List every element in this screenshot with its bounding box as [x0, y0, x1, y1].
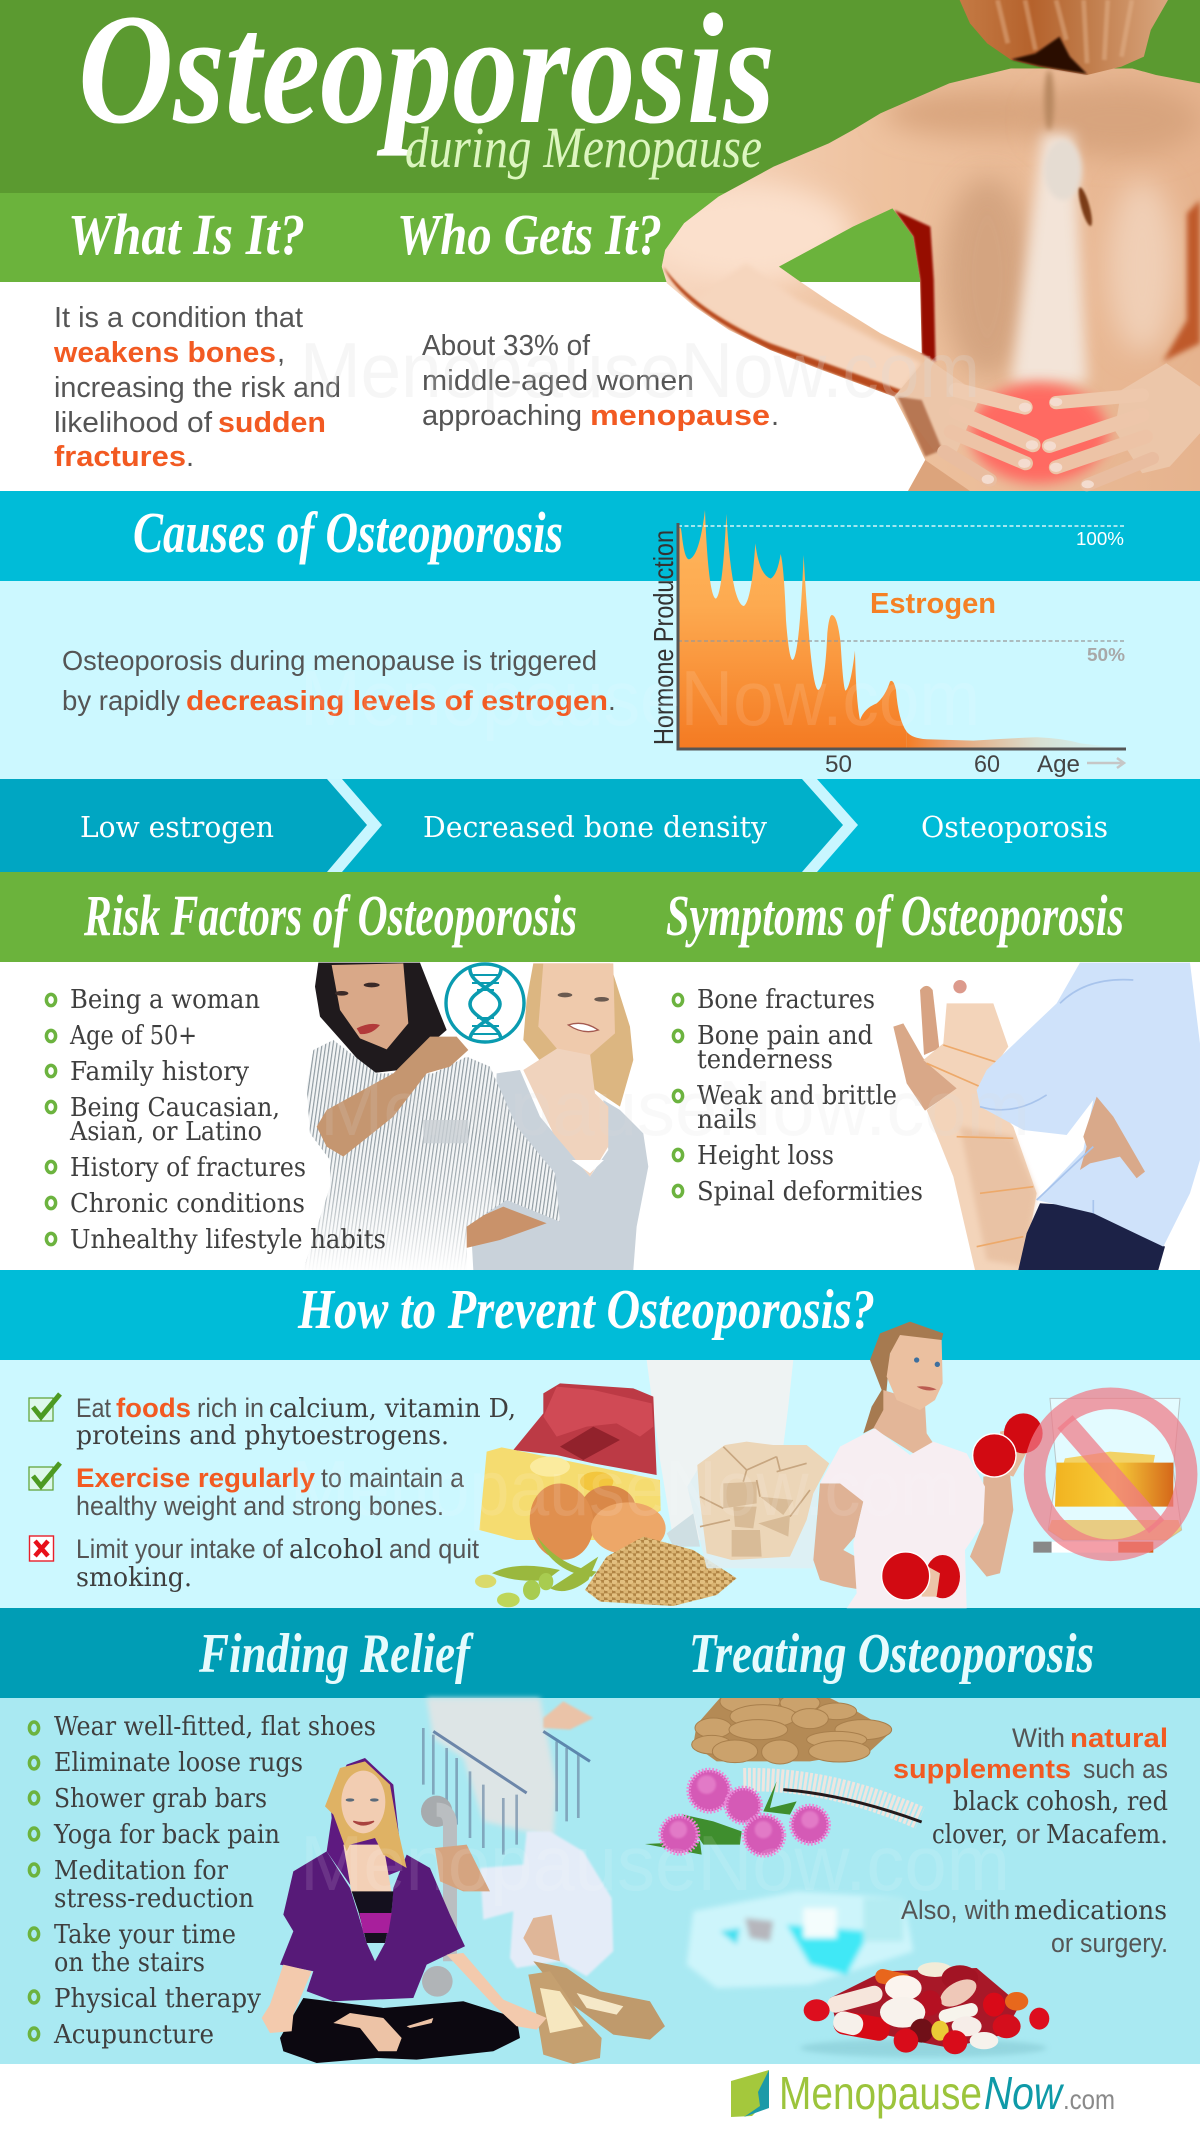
- list items: [697, 985, 923, 1207]
- heading: who gets it: Who Gets It?: [397, 202, 662, 267]
- icon: DNA helix: [446, 964, 524, 1042]
- text block: what is it: [53, 302, 341, 473]
- eggs: [581, 1486, 636, 1531]
- ponytail and hair: [863, 1322, 943, 1433]
- text block: who gets it: About 33% of: [422, 330, 591, 362]
- hand: [543, 1701, 593, 1730]
- dumbbell upper: [973, 1413, 1043, 1477]
- text block: what is it: fractures: [54, 441, 186, 473]
- text block: what is it: .: [186, 441, 194, 473]
- list items: Height loss: [697, 1141, 834, 1171]
- clover blossoms: [661, 1770, 829, 1855]
- tick 60: 60: [974, 751, 1000, 778]
- logo word: Now: Now: [984, 2067, 1064, 2119]
- watermark: MenopauseNow.com: [300, 1819, 1010, 1907]
- panel: what is it body: [0, 282, 1200, 491]
- text block: what is it: ,: [277, 337, 285, 369]
- list items: Weak and brittle: [697, 1081, 897, 1111]
- text block: treatments: black cohosh, red: [953, 1787, 1168, 1817]
- logo: MenopauseNow.com: [731, 2067, 1115, 2119]
- face: [887, 1335, 943, 1410]
- item: foods: proteins and phytoestrogens.: [76, 1421, 449, 1451]
- label estrogen: Estrogen: [870, 588, 996, 620]
- list items: stress-reduction: [54, 1884, 254, 1914]
- list items: Chronic conditions: [70, 1189, 305, 1219]
- band: prevent heading: [0, 1270, 1200, 1360]
- hair: [960, 0, 1168, 75]
- jacket: [280, 1851, 465, 2001]
- top panel: [359, 1913, 392, 1933]
- item: foods: Eat: [76, 1393, 111, 1423]
- dashed line 100%: [678, 525, 1126, 527]
- text block: who gets it: menopause: [590, 400, 770, 432]
- band: what is it / who gets it: [0, 193, 1200, 282]
- text block: treatments: medications: [1014, 1896, 1167, 1926]
- hand and wrist: [1000, 1427, 1032, 1477]
- tablets: [691, 1698, 892, 1764]
- step 3 background: [0, 779, 1200, 872]
- text block: what is it: increasing the risk and: [54, 372, 341, 404]
- prevention checklist: [29, 1393, 516, 1593]
- list items: tenderness: [697, 1045, 833, 1075]
- bandage folds: [927, 1045, 1033, 1247]
- text block: treatments: Also, with: [901, 1895, 1010, 1925]
- faded woman on stairs: [427, 1698, 557, 1838]
- icon: no alcohol or smoking: [1033, 1398, 1187, 1553]
- item: exercise: [76, 1463, 465, 1521]
- text block: causes: .: [608, 685, 616, 716]
- logo icon: [731, 2070, 769, 2117]
- list items: nails: [697, 1105, 757, 1135]
- photo: herbal tablets: [691, 1698, 892, 1764]
- heading: what is it: What Is It?: [68, 202, 305, 267]
- item: foods: foods: [116, 1393, 191, 1423]
- t-shirt: [820, 1428, 985, 1608]
- band: causes heading: [0, 491, 1200, 581]
- glass: [1048, 1398, 1182, 1540]
- text block: causes: [62, 645, 616, 716]
- item: exercise: Exercise regularly: [76, 1463, 315, 1493]
- hair: [325, 1761, 407, 1868]
- list items: [53, 1712, 376, 2050]
- cohosh branch: [743, 1780, 922, 1822]
- milk glass: [647, 1360, 793, 1540]
- prohibition sign: [1035, 1398, 1187, 1550]
- text block: what is it: weakens bones: [53, 337, 276, 369]
- hand: [893, 1023, 960, 1111]
- heading: how to prevent: How to Prevent Osteoporosis?: [297, 1279, 875, 1341]
- step: osteoporosis: Osteoporosis: [921, 810, 1108, 844]
- tablet pile base: [693, 1698, 892, 1761]
- ice: [1063, 1452, 1155, 1464]
- photo: calcium-rich foods: [475, 1360, 829, 1607]
- bandage: [923, 1003, 1037, 1270]
- gripping hand: [435, 1845, 490, 1891]
- item: alcohol: smoking.: [76, 1563, 192, 1593]
- stair railing: [423, 1728, 590, 1855]
- feet: [333, 2013, 433, 2051]
- photo: clover and black cohosh: [645, 1770, 922, 1855]
- list items: Take your time: [54, 1920, 236, 1950]
- list items: Yoga for back pain: [53, 1820, 280, 1850]
- photo: home safety scene: [421, 1698, 665, 2064]
- tick 50: 50: [825, 751, 852, 778]
- photo: bandaged arm: [893, 963, 1200, 1270]
- text block: treatments: such as: [1083, 1754, 1168, 1784]
- chart: estrogen decline: [648, 510, 1126, 778]
- item: alcohol: and quit: [389, 1534, 479, 1564]
- finger: [920, 986, 939, 1055]
- text block: treatments: natural: [1070, 1723, 1168, 1753]
- item: foods: [76, 1393, 516, 1451]
- fingertip: [953, 980, 967, 993]
- photo: woman meditating: [262, 1758, 547, 2063]
- process flow: low estrogen to osteoporosis: [0, 779, 1200, 872]
- photo: pills and capsules: [800, 1962, 1049, 2057]
- text block: who gets it: middle-aged women: [422, 365, 694, 397]
- list items: Being a woman: [70, 985, 260, 1015]
- flat shoes: [528, 1961, 665, 2064]
- dumbbell lower: [882, 1552, 960, 1600]
- bullets: [46, 994, 56, 1245]
- watermark: MenopauseNow.com: [300, 326, 980, 414]
- text block: causes: by rapidly: [62, 685, 180, 716]
- text block: treatments: or: [1016, 1819, 1040, 1849]
- icon: check 2: [29, 1463, 60, 1490]
- item: exercise: healthy weight and strong bones.: [76, 1491, 444, 1521]
- list items: on the stairs: [54, 1948, 205, 1978]
- tofu: [697, 1442, 829, 1560]
- panel: prevent body: [0, 1360, 1200, 1608]
- photo: woman exercising with dumbbells: [813, 1322, 1043, 1608]
- watermark: [290, 326, 1030, 1907]
- list items: History of fractures: [70, 1153, 306, 1183]
- band: risk and symptoms heading: [0, 872, 1200, 962]
- area: low tail: [907, 732, 1123, 748]
- axes: [678, 523, 1126, 749]
- subtitle: during Menopause: [405, 115, 762, 180]
- list items: Family history: [70, 1057, 249, 1087]
- item: alcohol: alcohol: [289, 1535, 383, 1565]
- bullets: [673, 994, 683, 1197]
- photo: two women with neck and back pain: [303, 963, 648, 1270]
- list items: Asian, or Latino: [69, 1117, 262, 1147]
- arrow: age: [1087, 758, 1124, 768]
- icon: cross: [30, 1536, 54, 1561]
- hood: [327, 1758, 407, 1885]
- text block: what is it: It is a condition that: [54, 302, 303, 334]
- text block: causes: Osteoporosis during menopause is triggered: [62, 645, 597, 676]
- chevron 1: [327, 779, 382, 872]
- relief list: [29, 1712, 376, 2050]
- y axis label: Hormone Production: [648, 530, 679, 745]
- panel: risk and symptoms body: [0, 962, 1200, 1270]
- bandage shadow: [960, 1127, 1037, 1267]
- text block: who gets it: approaching: [422, 400, 582, 432]
- label 50%: 50%: [1087, 645, 1125, 665]
- list items: Shower grab bars: [54, 1784, 267, 1814]
- chevron 2: [802, 779, 858, 872]
- blossom highlights: [670, 1775, 819, 1838]
- list items: Meditation for: [54, 1856, 229, 1886]
- list items: Eliminate loose rugs: [54, 1748, 303, 1778]
- woman left: [303, 963, 560, 1270]
- meat: [513, 1383, 657, 1475]
- list items: Unhealthy lifestyle habits: [70, 1225, 386, 1255]
- header band: dark green: [0, 0, 1200, 193]
- step: low estrogen: Low estrogen: [80, 810, 274, 844]
- bullets: [29, 1722, 39, 2040]
- text block: causes: decreasing levels of estrogen: [186, 685, 608, 716]
- dashed line 50%: [678, 640, 1126, 642]
- photo: blurred hospital scene: [687, 1891, 913, 1988]
- age label: Age: [1037, 751, 1080, 778]
- heading: causes: Causes of Osteoporosis: [133, 500, 563, 565]
- item: exercise: to maintain a: [321, 1463, 465, 1493]
- symptoms list: [673, 985, 923, 1207]
- tofu glass: [687, 1468, 818, 1568]
- area: hormone production: [679, 510, 907, 748]
- grab bar: [421, 1796, 453, 1997]
- item: foods: rich in: [197, 1393, 264, 1423]
- edamame: [492, 1537, 598, 1591]
- heading: risk factors: Risk Factors of Osteoporosis: [83, 883, 577, 948]
- watermark: MenopauseNow.com: [320, 1064, 1030, 1152]
- shirt fold lines: [980, 980, 1133, 1213]
- arms: [813, 1483, 883, 1593]
- text block: who gets it: .: [771, 400, 779, 432]
- text block: treatments: With: [1012, 1723, 1065, 1753]
- chest: [343, 1845, 392, 1893]
- shirt: [977, 963, 1200, 1247]
- legs: [280, 1998, 520, 2063]
- text block: treatments: supplements: [893, 1754, 1071, 1784]
- hand on hip: [1080, 1097, 1145, 1178]
- left hand: [894, 358, 1038, 484]
- cheese: [479, 1447, 661, 1540]
- woman right: [463, 963, 648, 1270]
- step 1 background: [0, 779, 382, 872]
- hand holding shoes: [523, 1915, 560, 1961]
- panel: relief and treating body: [0, 1698, 1200, 2064]
- watermark: MenopauseNow.com: [300, 654, 980, 742]
- text block: what is it: sudden: [218, 407, 326, 439]
- icon: check 1: [29, 1394, 60, 1421]
- watermark: MenopauseNow.com: [290, 1444, 960, 1532]
- list items: Spinal deformities: [697, 1177, 923, 1207]
- text block: treatments: clover,: [932, 1820, 1008, 1850]
- item: alcohol: [76, 1534, 479, 1593]
- list items: [69, 985, 386, 1255]
- whisky base: [1048, 1520, 1182, 1540]
- band: relief and treating heading: [0, 1608, 1200, 1698]
- text block: what is it: likelihood of: [54, 407, 213, 439]
- tofu cube edges: [700, 1447, 810, 1527]
- leaves: [645, 1781, 797, 1855]
- step: decreased bone density: Decreased bone density: [423, 810, 768, 844]
- face: [341, 1771, 385, 1833]
- item: alcohol: Limit your intake of: [76, 1534, 283, 1564]
- list items: Age of 50+: [69, 1021, 197, 1051]
- label 100%: 100%: [1076, 529, 1124, 549]
- neck: [873, 1390, 933, 1453]
- text block: treatments: Macafem.: [1046, 1820, 1168, 1850]
- list items: Wear well-fitted, flat shoes: [54, 1712, 376, 1742]
- right hand: [1044, 363, 1200, 488]
- heading: finding relief: Finding Relief: [198, 1623, 474, 1685]
- cigarette: [1033, 1542, 1052, 1553]
- text block: who gets it: [422, 330, 779, 432]
- photo: woman holding lower back: [646, 0, 1200, 493]
- list items: Bone pain and: [697, 1021, 873, 1051]
- risk factors list: [46, 985, 386, 1255]
- trousers: [1018, 1203, 1165, 1270]
- sports top: [352, 1891, 393, 1943]
- arms: [262, 1965, 312, 2033]
- list items: Physical therapy: [54, 1984, 261, 2014]
- panel: causes body: [0, 581, 1200, 779]
- logo word: .com: .com: [1063, 2084, 1115, 2115]
- item: foods: calcium, vitamin D,: [269, 1394, 516, 1424]
- whisky: [1055, 1463, 1173, 1507]
- heading: treating osteoporosis: Treating Osteoporosis: [689, 1623, 1094, 1685]
- text block: treatments: or surgery.: [1051, 1928, 1168, 1958]
- soybeans: [585, 1537, 737, 1606]
- text block: treatments: [893, 1723, 1168, 1958]
- list items: Bone fractures: [697, 985, 875, 1015]
- bathrobe: [480, 1831, 613, 1976]
- logo word: Menopause: Menopause: [779, 2067, 982, 2119]
- step 2 background: [0, 779, 858, 872]
- list items: Being Caucasian,: [70, 1093, 280, 1123]
- list items: Acupuncture: [53, 2020, 214, 2050]
